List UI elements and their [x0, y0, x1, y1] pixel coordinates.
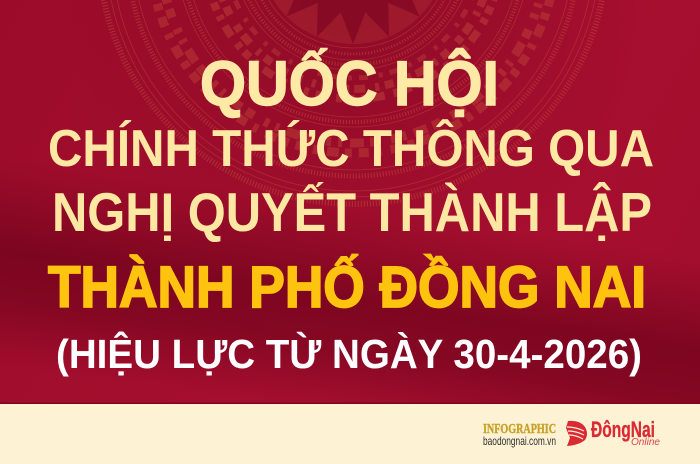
- panel: footer band: [0, 404, 700, 464]
- logo tagline: Online: [631, 437, 660, 448]
- effective date: (HIỆU LỰC TỪ NGÀY 30-4-2026): [56, 331, 642, 377]
- icon: Dong Nai logo mark: [566, 421, 587, 446]
- bronze drum pattern: [99, 0, 607, 204]
- main title: [48, 48, 654, 377]
- headline: Quốc hội: QUỐC HỘI: [200, 48, 499, 119]
- website address: baodongnai.com.vn: [483, 434, 556, 448]
- drum star: [274, 0, 432, 44]
- logo wordmark: ĐôngNai: [591, 417, 655, 442]
- headline line: chính thức thông qua: CHÍNH THỨC THÔNG QUA: [48, 119, 654, 178]
- highlighted headline: thành phố Đồng Nai: THÀNH PHỐ ĐỒNG NAI: [48, 255, 646, 320]
- label: infographic: INFOGRAPHIC: [483, 422, 556, 437]
